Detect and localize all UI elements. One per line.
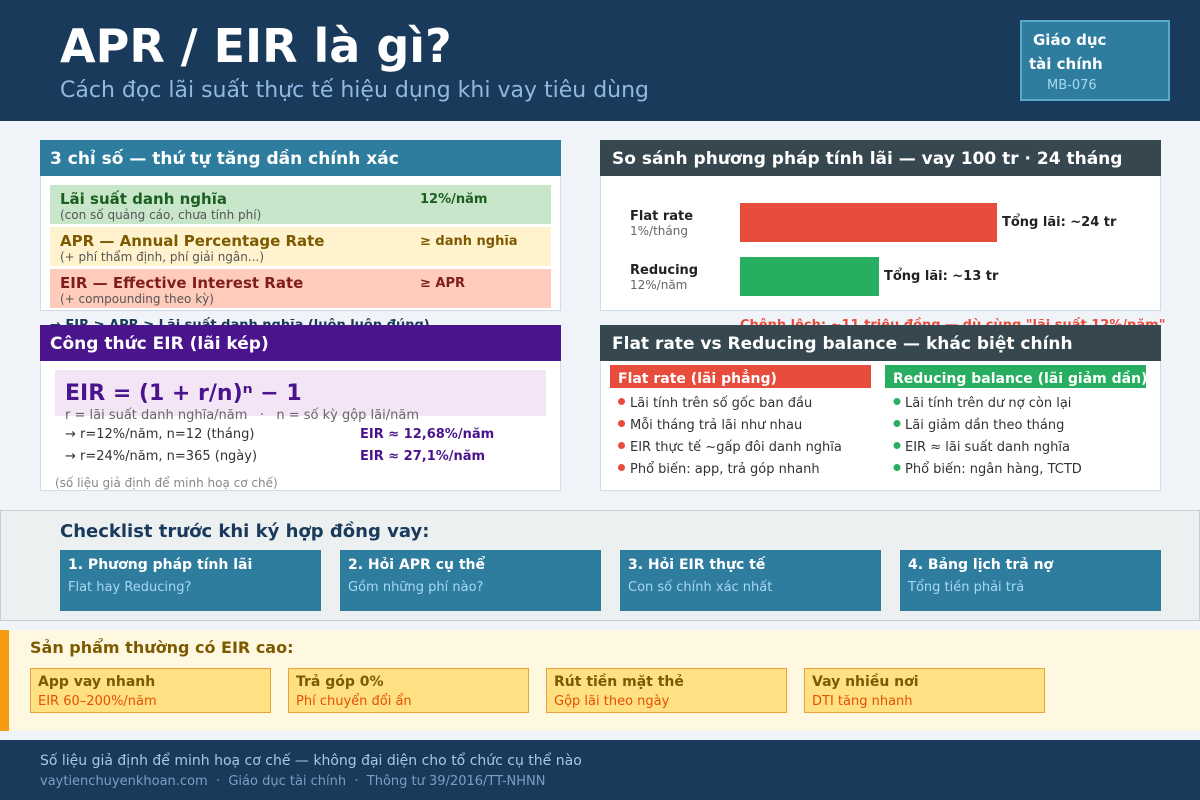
panel heading: 3 indicators: 3 chỉ số — thứ tự tăng dần chính xác: [50, 148, 399, 169]
bar: flat rate: [630, 203, 1117, 242]
panel: flat vs reducing: [600, 325, 1161, 490]
footer: Số liệu giả định để minh hoạ cơ chế — không đại diện cho tổ chức cụ thể nào: [40, 752, 582, 769]
bar: reducing: Reducing: [630, 263, 698, 278]
header banner: [0, 0, 1200, 121]
card: step 4: [900, 550, 1161, 611]
column: flat rate: Flat rate (lãi phẳng): [618, 369, 777, 387]
row: APR: APR — Annual Percentage Rate: [60, 232, 324, 250]
card: step 4: Tổng tiền phải trả: [907, 580, 1024, 595]
column: reducing balance: Phổ biến: ngân hàng, TCTD: [905, 462, 1082, 477]
disclaimer: (số liệu giả định để minh hoạ cơ chế): [55, 476, 278, 490]
example 2: [65, 449, 485, 464]
panel heading: EIR formula: Công thức EIR (lãi kép): [50, 334, 269, 354]
row: EIR: EIR — Effective Interest Rate: [60, 274, 303, 292]
row: EIR: [50, 269, 551, 308]
row: APR: [50, 227, 551, 266]
example 1: → r=12%/năm, n=12 (tháng): [65, 427, 254, 442]
example 2: → r=24%/năm, n=365 (ngày): [65, 449, 257, 464]
note: ordering of rates: → EIR ≥ APR ≥ Lãi suất danh nghĩa (luôn luôn đúng): [50, 318, 430, 333]
badge: category: MB-076: [1047, 78, 1097, 93]
card: step 3: Con số chính xác nhất: [628, 580, 772, 595]
title: APR / EIR là gì?: [60, 19, 452, 73]
card: card cash advance: Gộp lãi theo ngày: [554, 694, 670, 709]
formula legend: r = lãi suất danh nghĩa/năm · n = số kỳ gộp lãi/năm: [65, 408, 419, 423]
column: reducing balance: Lãi tính trên dư nợ còn lại: [905, 396, 1071, 411]
card: 0% installment: [288, 668, 528, 712]
column: flat rate: Phổ biến: app, trả góp nhanh: [630, 462, 820, 477]
panel heading: method comparison: [600, 140, 1161, 176]
example 2: EIR ≈ 27,1%/năm: [360, 449, 485, 464]
column: reducing balance: Reducing balance (lãi giảm dần): [893, 370, 1147, 387]
card: step 3: 3. Hỏi EIR thực tế: [628, 556, 766, 573]
card: quick loan app: EIR 60–200%/năm: [38, 694, 157, 709]
card: card cash advance: Rút tiền mặt thẻ: [554, 673, 684, 690]
row: APR: (+ phí thẩm định, phí giải ngân...): [60, 250, 264, 264]
panel: 3 indicators: [40, 140, 561, 310]
card: multiple lenders: [804, 668, 1044, 712]
badge: category: [1021, 21, 1169, 100]
note: difference: Chênh lệch: ~11 triệu đồng — dù cùng "lãi suất 12%/năm": [740, 318, 1165, 333]
panel: EIR formula: [40, 325, 561, 490]
card: card cash advance: [546, 668, 786, 712]
bar: flat rate: Flat rate: [630, 209, 693, 224]
checklist heading: Checklist trước khi ký hợp đồng vay:: [60, 521, 429, 542]
row: nominal rate: 12%/năm: [420, 192, 487, 207]
example 1: [65, 427, 494, 442]
card: step 2: Gồm những phí nào?: [348, 580, 483, 595]
panel heading: method comparison: So sánh phương pháp tính lãi — vay 100 tr · 24 tháng: [612, 149, 1122, 169]
card: 0% installment: Trả góp 0%: [296, 674, 384, 690]
footer: [0, 740, 1200, 800]
card: step 3: [620, 550, 881, 611]
badge: category: tài chính: [1029, 55, 1103, 73]
formula box: [55, 370, 546, 416]
row: EIR: (+ compounding theo kỳ): [60, 292, 214, 306]
subtitle: Cách đọc lãi suất thực tế hiệu dụng khi vay tiêu dùng: [60, 78, 649, 103]
column: flat rate: EIR thực tế ~gấp đôi danh nghĩa: [630, 440, 842, 455]
card: step 4: 4. Bảng lịch trả nợ: [908, 557, 1054, 573]
bar: flat rate: Tổng lãi: ~24 tr: [1002, 214, 1117, 230]
row: nominal rate: (con số quảng cáo, chưa tính phí): [60, 208, 261, 222]
badge: category: Giáo dục: [1033, 31, 1106, 49]
column: reducing balance: [885, 365, 1147, 477]
card: step 1: [60, 550, 321, 611]
formula box: EIR = (1 + r/n)ⁿ − 1: [65, 381, 302, 406]
panel: method comparison: [600, 140, 1161, 310]
row: APR: ≥ danh nghĩa: [420, 234, 518, 249]
panel heading: flat vs reducing: [600, 325, 1161, 361]
row: nominal rate: Lãi suất danh nghĩa: [60, 190, 227, 208]
bar: flat rate: 1%/tháng: [630, 224, 688, 238]
column: flat rate: Mỗi tháng trả lãi như nhau: [630, 418, 802, 433]
card: multiple lenders: DTI tăng nhanh: [812, 694, 913, 709]
card: step 2: 2. Hỏi APR cụ thể: [348, 556, 485, 573]
card: quick loan app: App vay nhanh: [38, 674, 155, 690]
column: reducing balance: EIR ≈ lãi suất danh nghĩa: [905, 440, 1070, 455]
bar: reducing: Tổng lãi: ~13 tr: [884, 268, 999, 284]
products heading: Sản phẩm thường có EIR cao:: [30, 638, 294, 657]
column: flat rate: [610, 365, 871, 477]
panel heading: EIR formula: [40, 325, 561, 361]
row: EIR: ≥ APR: [420, 276, 465, 291]
band: checklist: [0, 510, 1200, 620]
footer: vaytienchuyenkhoan.com · Giáo dục tài chính · Thông tư 39/2016/TT-NHNN: [40, 774, 546, 789]
example 1: EIR ≈ 12,68%/năm: [360, 427, 494, 442]
card: multiple lenders: Vay nhiều nơi: [812, 673, 919, 690]
bar: reducing: [630, 257, 999, 296]
card: step 2: [340, 550, 601, 611]
band: high-EIR products: [0, 630, 1200, 731]
card: step 1: Flat hay Reducing?: [68, 580, 191, 595]
bar: reducing: 12%/năm: [630, 278, 687, 292]
column: reducing balance: Lãi giảm dần theo tháng: [905, 418, 1064, 433]
card: step 1: 1. Phương pháp tính lãi: [68, 557, 252, 573]
row: nominal rate: [50, 185, 551, 224]
column: flat rate: Lãi tính trên số gốc ban đầu: [630, 396, 812, 411]
panel heading: flat vs reducing: Flat rate vs Reducing balance — khác biệt chính: [612, 334, 1073, 354]
card: 0% installment: Phí chuyển đổi ẩn: [296, 694, 412, 709]
card: quick loan app: [30, 668, 270, 712]
panel heading: 3 indicators: [40, 140, 561, 176]
